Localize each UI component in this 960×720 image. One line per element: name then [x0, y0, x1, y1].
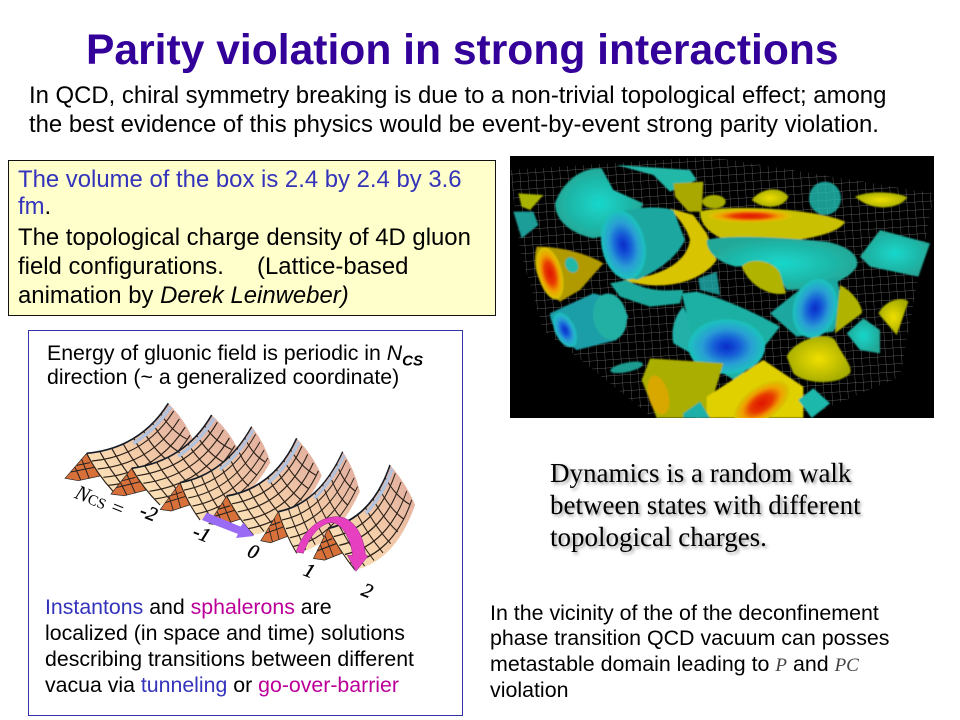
text: deconfinement note: phase transition QCD vacuum can posses [490, 626, 890, 650]
image: topological charge density [510, 156, 934, 418]
panel caption: localized (in space and time) solutions [45, 621, 405, 645]
callout: yellow box: The topological charge density of 4D gluon [18, 224, 471, 251]
isosurface blobs [513, 165, 930, 435]
floor grid [510, 157, 934, 418]
callout: yellow box: field configurations. (Lattice-based [18, 253, 408, 280]
tick: 1: 1 [300, 559, 318, 583]
arrow: tunneling [202, 513, 254, 538]
panel heading text: Energy of gluonic field is periodic in NCS [47, 341, 423, 369]
tick: 2: 2 [358, 579, 376, 603]
statement: random walk: topological charges. [550, 522, 767, 552]
panel: gluonic field energy [28, 330, 463, 716]
title: Parity violation in strong interactions [86, 26, 839, 74]
tick: -1: -1 [190, 521, 213, 547]
callout: yellow box: animation by Derek Leinweber) [18, 282, 349, 309]
callout: yellow box [8, 160, 496, 316]
text: deconfinement note: metastable domain leading to P and PC [490, 652, 859, 676]
callout: yellow box: The volume of the box is 2.4 by 2.4 by 3.6 [18, 166, 462, 193]
tick: -2: -2 [137, 500, 160, 526]
surface sheets [65, 403, 421, 574]
callout: yellow box: fm. [18, 193, 51, 220]
arrow: over barrier [296, 517, 368, 571]
tick: 0: 0 [244, 540, 262, 564]
panel caption: describing transitions between different [45, 647, 414, 671]
text: deconfinement note [490, 601, 890, 702]
intro text: In QCD, chiral symmetry breaking is due to a non-trivial topological effect; among [29, 82, 886, 109]
chart: periodic energy surface [64, 402, 415, 572]
panel heading text: direction (~ a generalized coordinate) [47, 365, 399, 389]
statement: random walk: Dynamics is a random walk [550, 458, 851, 488]
text: deconfinement note: violation [490, 678, 568, 702]
panel caption: Instantons and sphalerons are [45, 595, 332, 619]
text: deconfinement note: In the vicinity of the of the deconfinement [490, 601, 879, 625]
intro text [29, 82, 886, 138]
panel caption: vacua via tunneling or go-over-barrier [45, 673, 399, 697]
statement: random walk [550, 458, 864, 556]
axis label: NCS = [72, 480, 129, 522]
panel caption [45, 595, 414, 697]
intro text: the best evidence of this physics would be event-by-event strong parity violation. [29, 111, 879, 138]
panel heading text [47, 341, 423, 389]
statement: random walk: between states with different [550, 490, 861, 520]
